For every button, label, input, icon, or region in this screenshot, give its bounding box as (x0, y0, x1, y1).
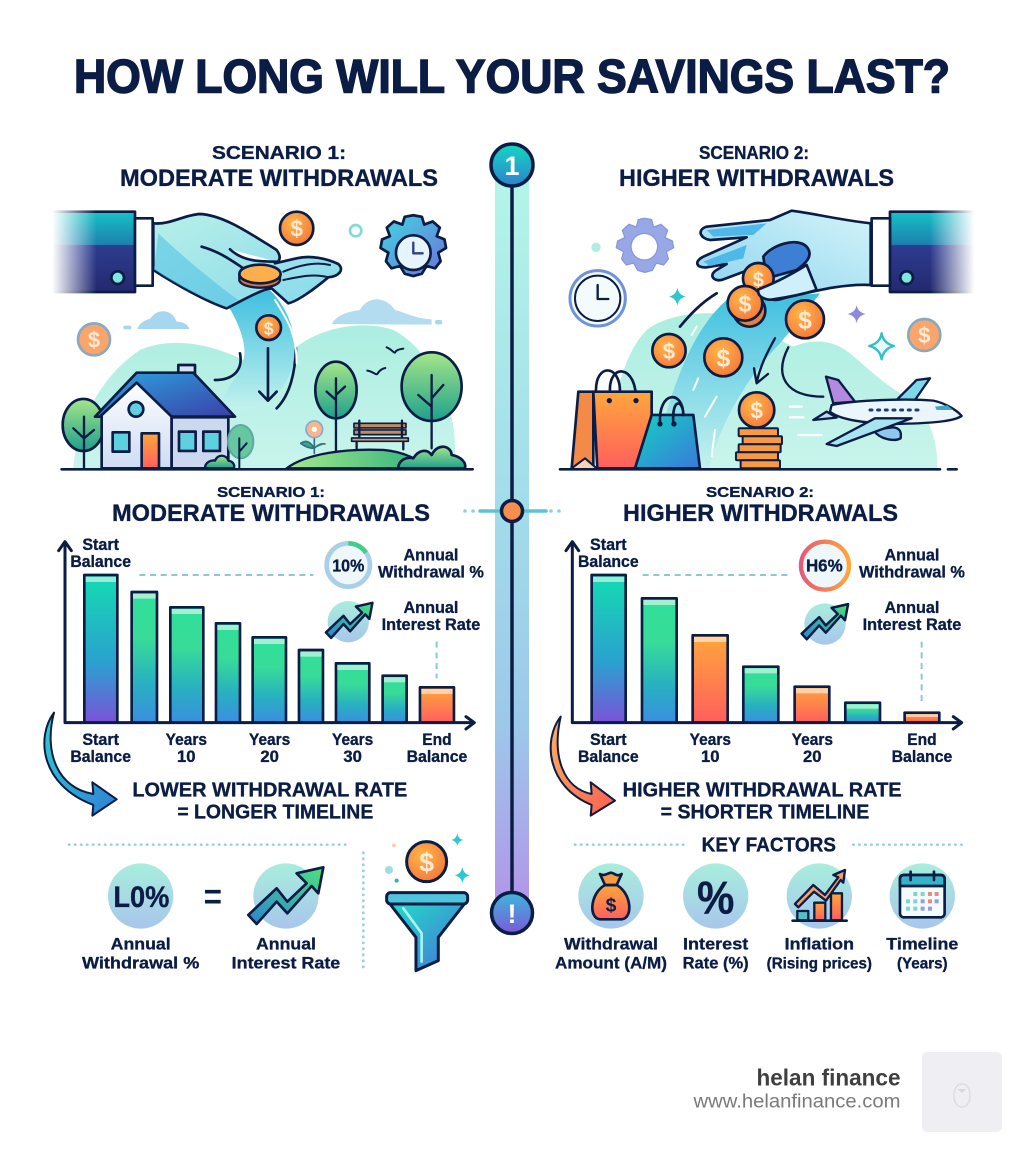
speed lines (790, 407, 822, 435)
interest label: Annual (403, 598, 458, 617)
curved arrow (44, 713, 117, 816)
takeaway (623, 780, 902, 823)
panel: moderate withdrawal chart (44, 535, 484, 823)
x axis labels: Start (82, 730, 119, 749)
interest label (232, 934, 340, 972)
withdrawal label: Withdrawal % (859, 563, 965, 582)
brand footer (692, 1052, 1002, 1132)
flower (301, 421, 325, 453)
withdrawal label: Withdrawal % (82, 953, 200, 972)
factor: withdrawal amount: Withdrawal (564, 934, 658, 953)
curved arrow (551, 717, 615, 816)
pale coin (908, 319, 940, 351)
timeline node: exclamation: ! (508, 899, 516, 929)
coin: $ (716, 346, 730, 373)
center timeline (463, 144, 561, 934)
x axis labels: Years (792, 730, 833, 749)
coin: $ (663, 339, 675, 364)
x axis labels: Balance (407, 747, 467, 766)
withdrawal label: Annual (111, 934, 171, 953)
interest label (863, 598, 961, 634)
dashed guides (643, 575, 922, 702)
heading: scenario 2 chart (623, 484, 898, 527)
factor: interest rate: % (697, 871, 734, 923)
withdrawal label (378, 546, 484, 582)
sparkles (591, 243, 894, 359)
x axis labels: Balance (578, 747, 639, 766)
airplane (813, 377, 962, 446)
grabbing hand (697, 211, 871, 300)
interest label: Annual (256, 934, 316, 953)
factor: inflation (767, 863, 872, 972)
water stream (215, 290, 297, 410)
illustration: higher withdrawals (560, 208, 982, 469)
factor: timeline: (Years) (897, 955, 948, 972)
heading: scenario 1 top (120, 143, 438, 192)
x axis labels: 10 (177, 747, 196, 766)
panel: higher withdrawal chart (551, 535, 965, 823)
falling coin (256, 315, 281, 340)
x axis labels: 20 (803, 747, 822, 766)
withdrawal label: Annual (884, 546, 939, 565)
x axis labels (70, 730, 467, 766)
factor: timeline: Timeline (886, 934, 958, 953)
pale coin: $ (918, 323, 930, 348)
heading: scenario 1 chart: SCENARIO 1: (217, 484, 325, 501)
heading: scenario 1 top: MODERATE WITHDRAWALS (120, 165, 438, 192)
coin: $ (798, 308, 812, 335)
y axis label (578, 535, 639, 571)
factor: withdrawal amount: Amount (A/M) (555, 953, 667, 972)
small tree and bush (205, 425, 253, 468)
panel: formula (69, 833, 470, 972)
heading: scenario 1 chart: MODERATE WITHDRAWALS (112, 500, 430, 527)
timeline node: number 1 (491, 144, 533, 186)
timeline node: middle (502, 500, 522, 522)
takeaway: = LONGER TIMELINE (177, 801, 373, 823)
coin on stack: $ (750, 398, 763, 424)
gear (616, 218, 674, 272)
sleeve (45, 208, 153, 296)
factor: inflation: Inflation (785, 934, 854, 953)
coin (704, 338, 742, 376)
heading: scenario 2 top (619, 143, 894, 192)
grass knoll (287, 450, 430, 468)
withdrawal circle (108, 863, 173, 929)
brand name: helan finance (756, 1064, 900, 1090)
withdrawal ring: 10% (332, 555, 364, 575)
axes (566, 542, 962, 729)
coin (280, 212, 313, 245)
back coin (743, 263, 774, 294)
x axis labels: End (907, 730, 937, 749)
dashed guides (139, 575, 437, 678)
x axis labels: Years (249, 730, 290, 749)
heading: scenario 2 chart: HIGHER WITHDRAWALS (623, 500, 898, 527)
x axis labels: 10 (701, 747, 720, 766)
interest label: Interest Rate (232, 953, 340, 972)
shopping bags (572, 370, 700, 468)
heading: scenario 1 chart (112, 484, 430, 527)
x axis labels: Start (590, 730, 627, 749)
house (95, 365, 235, 468)
withdrawal ring: H6% (806, 556, 843, 576)
coin (652, 334, 686, 367)
factor: withdrawal amount (555, 863, 667, 972)
coin (786, 300, 824, 338)
funnel coin: $ (419, 848, 434, 878)
interest label (382, 598, 480, 634)
heading: scenario 2 chart: SCENARIO 2: (706, 484, 814, 501)
factor: interest rate: Rate (%) (683, 953, 749, 972)
coin on stack (739, 392, 774, 428)
coin stack (736, 428, 782, 468)
coins cluster (728, 286, 765, 327)
hills (73, 325, 455, 468)
interest circle (248, 863, 323, 929)
funnel coin (407, 842, 447, 882)
back coin: $ (753, 270, 764, 292)
left tree (63, 399, 104, 468)
y axis label: Start (82, 535, 119, 554)
key factors heading: KEY FACTORS (702, 835, 836, 857)
gear clock (381, 215, 446, 276)
heading: scenario 2 top: HIGHER WITHDRAWALS (619, 165, 894, 192)
clock (570, 271, 625, 326)
takeaway: = SHORTER TIMELINE (661, 801, 869, 823)
pale coin (78, 323, 110, 355)
withdrawal label (859, 546, 965, 582)
y axis label: Balance (578, 552, 639, 571)
sleeve (872, 208, 982, 296)
interest icon (326, 601, 372, 642)
bar chart (592, 575, 939, 723)
illustration: moderate withdrawals (45, 208, 473, 469)
x axis labels: Years (166, 730, 207, 749)
stream (653, 293, 820, 468)
x axis labels: Balance (892, 747, 952, 766)
x axis labels: Years (332, 730, 373, 749)
withdrawal label: Annual (403, 546, 458, 565)
takeaway: LOWER WITHDRAWAL RATE (132, 780, 407, 802)
x axis labels: 30 (343, 747, 362, 766)
middle tree (315, 362, 357, 452)
x axis labels (578, 730, 952, 766)
brand url: www.helanfinance.com (692, 1092, 900, 1112)
curved motion lines (754, 338, 823, 397)
axes (59, 542, 474, 729)
withdrawal ring (801, 542, 849, 590)
falling coin: $ (264, 318, 274, 338)
takeaway (132, 780, 407, 823)
withdrawal circle: L0% (113, 881, 169, 914)
factor: inflation: (Rising prices) (767, 955, 872, 972)
thumb (758, 265, 817, 300)
bush (398, 447, 465, 468)
x axis labels: End (422, 730, 452, 749)
hills (605, 313, 937, 468)
timeline node: number 1: 1 (504, 151, 520, 181)
open hand (153, 214, 341, 308)
interest label: Annual (884, 598, 939, 617)
sparkles (385, 833, 470, 883)
right tree (402, 352, 462, 448)
heading: scenario 1 top: SCENARIO 1: (212, 143, 346, 163)
coins cluster: $ (738, 291, 751, 317)
factor: withdrawal amount: $ (606, 896, 617, 917)
factor: interest rate: Interest (683, 934, 749, 953)
ground line (560, 465, 957, 473)
birds (367, 347, 403, 374)
y axis label: Start (590, 535, 627, 554)
timeline node: exclamation (492, 892, 532, 934)
factor: timeline (886, 863, 958, 972)
heading: scenario 2 top: SCENARIO 2: (699, 143, 809, 163)
coin on palm (239, 265, 281, 288)
interest label: Interest Rate (863, 615, 961, 634)
x axis labels: Balance (70, 747, 131, 766)
interest icon (802, 603, 848, 645)
ground line (62, 465, 473, 473)
clouds (123, 299, 442, 329)
title: HOW LONG WILL YOUR SAVINGS LAST? (74, 50, 950, 102)
panel: key factors (555, 835, 963, 972)
y axis label: Balance (70, 552, 131, 571)
ring (350, 225, 361, 236)
down arrow (259, 348, 277, 401)
withdrawal ring (327, 543, 370, 587)
logo tile (922, 1052, 1002, 1132)
bar chart (84, 575, 454, 723)
funnel icon (387, 893, 468, 971)
y axis label (70, 535, 131, 571)
takeaway: HIGHER WITHDRAWAL RATE (623, 780, 902, 802)
factor: interest rate (683, 863, 749, 972)
bench (352, 421, 408, 449)
pale coin: $ (88, 327, 100, 352)
coin: $ (290, 216, 303, 242)
equals sign (205, 892, 221, 902)
x axis labels: 20 (260, 747, 279, 766)
withdrawal label (82, 934, 200, 972)
x axis labels: Years (690, 730, 731, 749)
interest label: Interest Rate (382, 615, 480, 634)
withdrawal label: Withdrawal % (378, 563, 484, 582)
